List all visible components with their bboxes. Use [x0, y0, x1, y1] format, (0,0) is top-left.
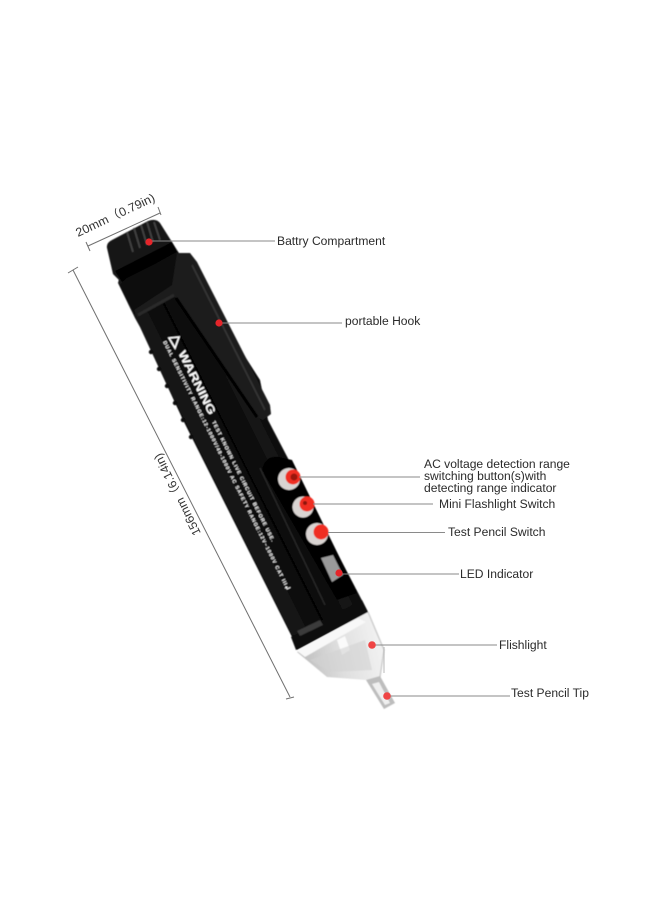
label: LED indicator: LED Indicator	[460, 567, 533, 581]
label: mini flashlight switch: Mini Flashlight Switch	[439, 497, 555, 511]
label: flashlight: Flishlight	[499, 638, 547, 652]
transparent tip	[297, 612, 395, 709]
dimension: length 156mm	[68, 267, 294, 699]
LED screen	[321, 555, 343, 582]
warning label: DUAL SENSITIVITY RANGE:12-1000V/48-1000V AC SAFETY RANGE:12V~1000V CAT III	[161, 340, 288, 587]
label: AC voltage detection: detecting range indicator	[424, 481, 556, 495]
warning label: TEST KNOWN LIVE CIRCUIT BEFORE USE.	[210, 420, 276, 543]
buttons	[278, 468, 328, 545]
label: test pencil tip: Test Pencil Tip	[511, 686, 589, 700]
pen body	[118, 250, 368, 650]
portable hook clip	[134, 253, 271, 420]
label: test pencil switch: Test Pencil Switch	[448, 525, 545, 539]
tester pen	[107, 220, 395, 709]
dimension: width 20mm: 20mm（0.79in)	[73, 191, 157, 240]
battery cap	[107, 220, 177, 281]
grip bumps	[149, 350, 193, 439]
label: portable hook: portable Hook	[345, 314, 421, 328]
callout lines	[149, 241, 510, 696]
warning label: WARNING	[175, 349, 217, 417]
label: AC voltage detection: switching button(s)with	[424, 469, 546, 483]
button panel	[262, 457, 357, 600]
red marker dots	[145, 238, 391, 700]
label: battery compartment: Battry Compartment	[277, 234, 386, 248]
dimension: length 156mm: 156mm（6.14in)	[151, 451, 204, 538]
warning label: ↲	[282, 583, 292, 592]
label: AC voltage detection: AC voltage detection range	[424, 457, 570, 471]
labels	[277, 234, 589, 700]
